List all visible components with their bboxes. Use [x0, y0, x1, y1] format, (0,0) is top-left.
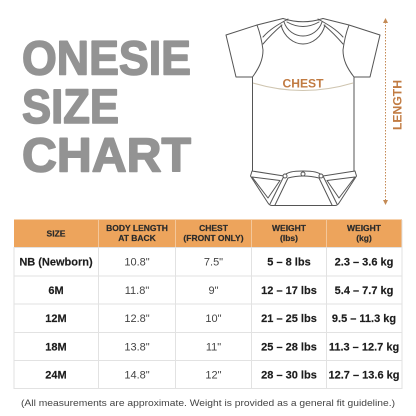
snap crotch	[250, 171, 356, 206]
size column	[19, 256, 93, 382]
size table	[14, 220, 402, 389]
size column: 24M	[45, 370, 67, 382]
header labels: CHEST	[199, 223, 229, 233]
size column: 18M	[45, 342, 67, 354]
weight lbs column: 12 – 17 lbs	[261, 285, 317, 297]
body length column: 10.8"	[124, 256, 150, 268]
title	[22, 32, 191, 182]
header labels: (FRONT ONLY)	[183, 233, 244, 243]
weight lbs column: 21 – 25 lbs	[261, 313, 317, 325]
size column: 6M	[48, 285, 64, 297]
chest column: 7.5"	[204, 256, 223, 268]
size column: 12M	[45, 313, 67, 325]
onesie illustration	[226, 18, 380, 206]
length arrow	[383, 18, 388, 205]
chest column: 9"	[208, 285, 219, 297]
table header	[14, 220, 402, 247]
header labels: BODY LENGTH	[106, 223, 168, 233]
header labels: SIZE	[47, 228, 66, 238]
body length column: 12.8"	[124, 313, 150, 325]
body length column: 13.8"	[124, 342, 150, 354]
weight lbs column: 28 – 30 lbs	[261, 370, 317, 382]
weight lbs column: 25 – 28 lbs	[261, 342, 317, 354]
header labels	[47, 223, 382, 243]
title: ONESIE	[22, 32, 191, 86]
chest column	[204, 256, 223, 382]
weight kg column: 2.3 – 3.6 kg	[335, 256, 393, 268]
weight kg column: 11.3 – 12.7 kg	[329, 342, 399, 354]
title: CHART	[22, 130, 191, 182]
footnote: (All measurements are approximate. Weight is provided as a general fit guideline.)	[21, 398, 395, 409]
chest column: 10"	[205, 313, 222, 325]
header labels: WEIGHT	[347, 223, 382, 233]
weight kg column: 9.5 – 11.3 kg	[332, 313, 396, 325]
length label: LENGTH	[392, 80, 404, 130]
header labels: (kg)	[356, 233, 372, 243]
size column: NB (Newborn)	[19, 256, 93, 268]
chest column: 11"	[206, 342, 221, 354]
weight kg column: 12.7 – 13.6 kg	[329, 370, 399, 382]
header labels: WEIGHT	[272, 223, 307, 233]
left sleeve	[226, 18, 283, 77]
body length column	[124, 256, 150, 382]
header labels: AT BACK	[118, 233, 157, 243]
chest measure curve	[253, 83, 353, 90]
body sides	[252, 77, 354, 171]
title: SIZE	[22, 81, 119, 134]
body length column: 11.8"	[125, 285, 149, 297]
weight lbs column: 5 – 8 lbs	[267, 256, 311, 268]
chest column: 12"	[205, 370, 222, 382]
body length column: 14.8"	[124, 370, 150, 382]
weight lbs column	[261, 256, 317, 382]
right sleeve	[323, 18, 380, 77]
header labels: (lbs)	[280, 233, 298, 243]
weight kg column	[329, 256, 399, 382]
neckline	[263, 18, 343, 44]
weight kg column: 5.4 – 7.7 kg	[335, 285, 393, 297]
chest label: CHEST	[282, 78, 324, 90]
